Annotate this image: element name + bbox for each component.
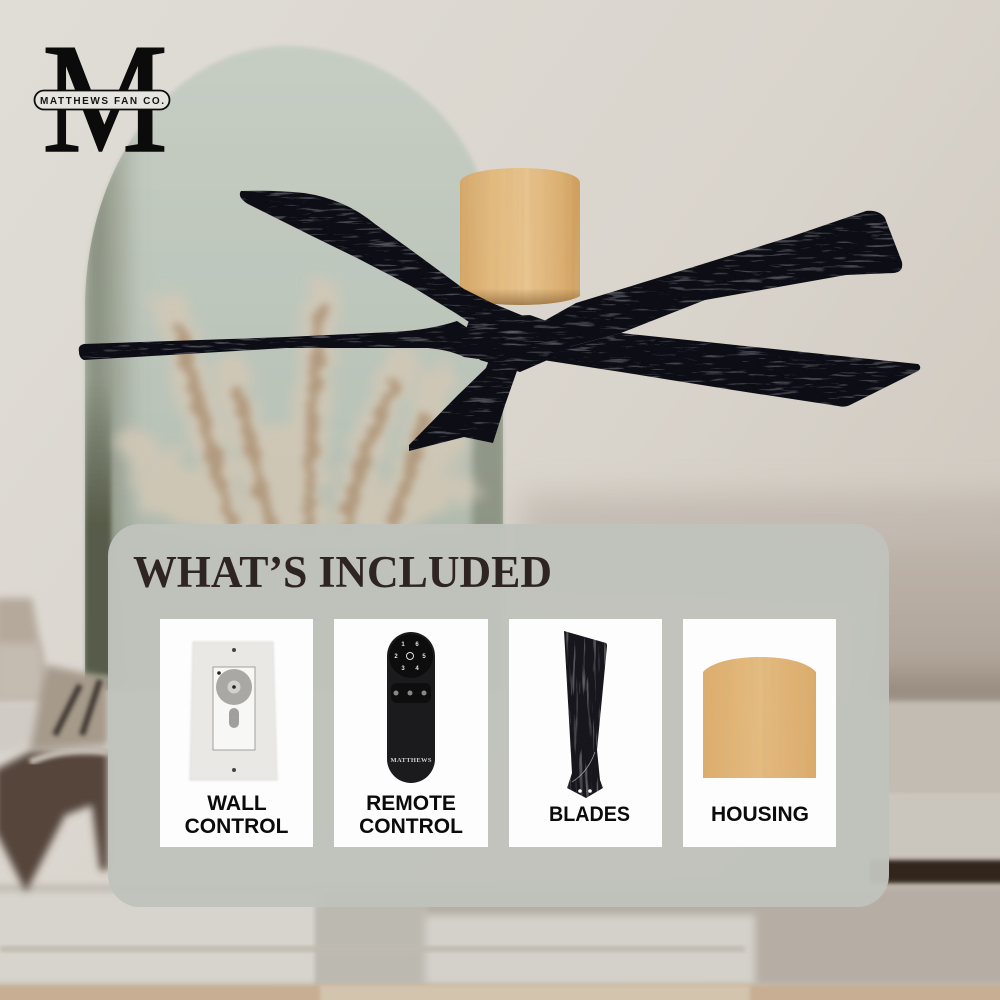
logo monogram M: M	[42, 12, 168, 186]
logo: Matthews Fan Co.	[34, 12, 170, 186]
blade: upper right	[526, 211, 902, 352]
icon: remote control: 1	[401, 642, 405, 648]
icon: remote control: MATTHEWS	[390, 757, 432, 764]
icon: remote control	[387, 632, 435, 783]
label: wall control: CONTROL	[185, 815, 289, 838]
label: wall control: WALL	[207, 792, 267, 815]
label: blades: BLADES	[549, 803, 630, 826]
icon: remote control: 3	[401, 666, 405, 672]
blade: upper left	[240, 191, 530, 344]
sofa on right	[870, 545, 1000, 884]
armchair and throw on left	[0, 598, 108, 892]
blade: lower	[409, 360, 543, 451]
label: remote control: REMOTE	[366, 792, 456, 815]
arched wall niche	[85, 46, 506, 690]
card: housing	[683, 619, 836, 847]
icon: wood housing	[703, 657, 816, 778]
pampas grass plant	[132, 292, 462, 530]
card: blades	[509, 619, 662, 847]
fan housing	[460, 168, 580, 305]
panel: what's included	[108, 524, 889, 907]
blade: lower right	[543, 333, 920, 407]
label: remote control: CONTROL	[359, 815, 463, 838]
fan hub	[462, 315, 580, 372]
right wall lower shade	[520, 495, 1000, 585]
fan blades	[79, 191, 920, 451]
floor	[0, 886, 1000, 1000]
logo name pill	[34, 90, 170, 110]
label: housing: HOUSING	[711, 803, 809, 826]
logo name pill: MATTHEWS FAN CO.	[40, 96, 164, 107]
card: wall control	[160, 619, 313, 847]
card: remote control	[334, 619, 488, 847]
icon: remote control: 2	[394, 654, 398, 660]
blade: left	[79, 321, 509, 360]
icon: remote control: 4	[415, 666, 419, 672]
icon: single blade	[564, 631, 607, 798]
icon: wall control	[190, 642, 277, 780]
heading: WHAT’S INCLUDED	[133, 547, 552, 597]
icon: remote control: 5	[422, 654, 426, 660]
icon: remote control: 6	[415, 642, 419, 648]
ceiling fan	[79, 168, 920, 451]
